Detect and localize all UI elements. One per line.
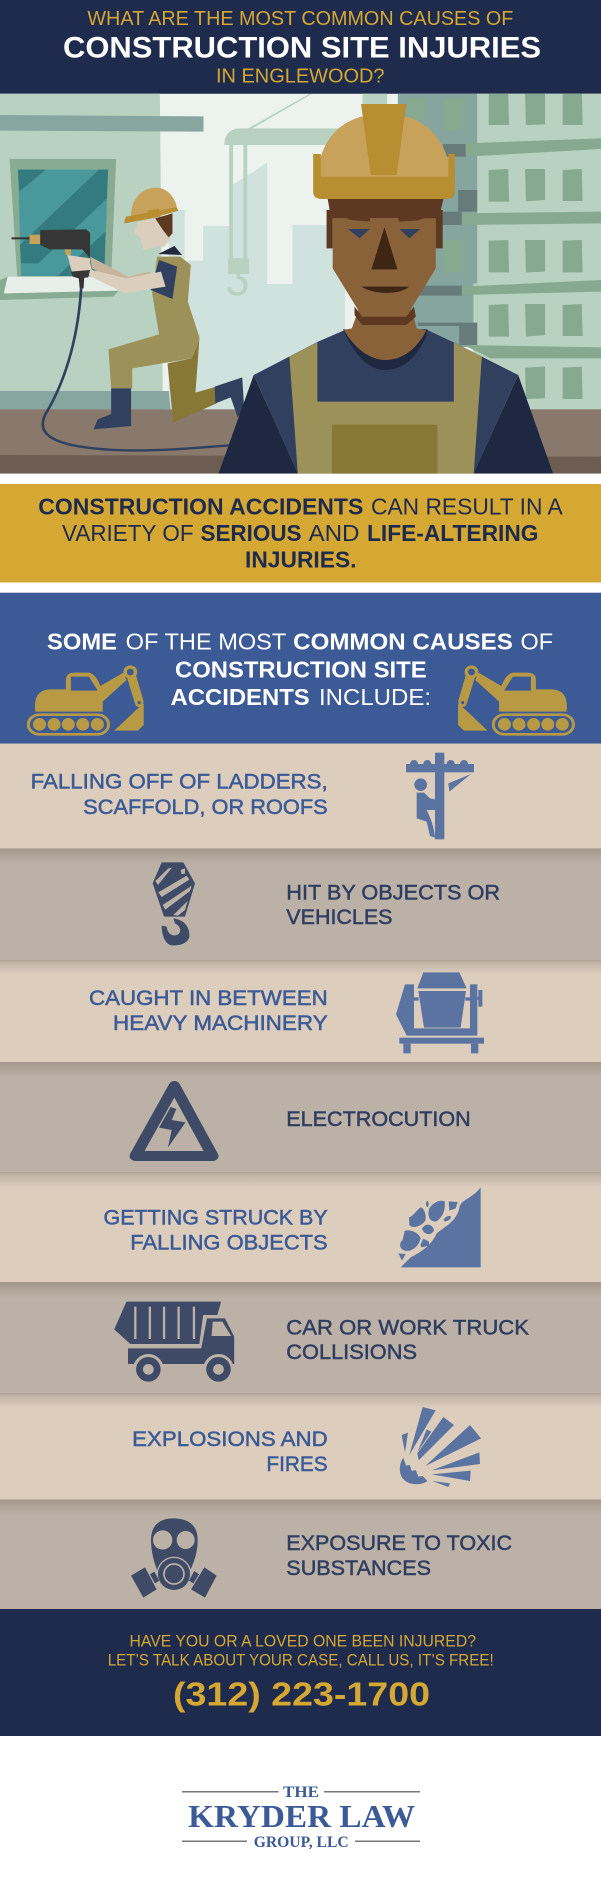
icon: gas mask	[131, 1518, 217, 1598]
illustration: construction workers	[0, 94, 601, 474]
heading: common causes: SOME	[47, 628, 117, 654]
text: toxic substances: SUBSTANCES	[286, 1557, 431, 1580]
large worker in hard hat	[218, 104, 553, 474]
logo: Kryder Law Group	[182, 1784, 420, 1851]
text: collisions	[286, 1316, 529, 1364]
heading: common causes: ACCIDENTS	[170, 684, 310, 710]
icon: pole climber	[406, 753, 474, 839]
panel: electrocution	[0, 1062, 601, 1172]
text: caught in machinery	[89, 987, 328, 1035]
text: hit by objects: HIT BY OBJECTS OR	[286, 881, 500, 904]
panel: call to action	[0, 1609, 601, 1736]
text: construction accidents statement	[38, 493, 563, 573]
logo: Kryder Law Group: KRYDER LAW	[188, 1798, 415, 1834]
heading: common causes: CONSTRUCTION SITE	[175, 656, 427, 682]
text: construction accidents statement: LIFE-ALTERING	[367, 520, 538, 546]
panel: toxic substances	[0, 1500, 601, 1609]
small worker with drill	[11, 188, 244, 450]
text: caught in machinery: HEAVY MACHINERY	[113, 1012, 328, 1035]
heading: main title: CONSTRUCTION SITE INJURIES	[63, 31, 541, 64]
text: falling: FALLING OFF OF LADDERS,	[31, 770, 328, 793]
icon: explosion	[400, 1407, 481, 1487]
text: construction accidents statement: CAN RESULT IN A	[371, 493, 563, 519]
heading: location line: IN ENGLEWOOD?	[216, 66, 384, 88]
text: struck by falling objects: GETTING STRUCK BY	[104, 1206, 328, 1229]
text: call to action	[108, 1633, 494, 1670]
text: construction accidents statement: CONSTRUCTION ACCIDENTS	[38, 493, 363, 519]
text: falling: SCAFFOLD, OR ROOFS	[83, 796, 328, 819]
heading: common causes: INCLUDE:	[319, 684, 431, 710]
logo: Kryder Law Group: GROUP, LLC	[254, 1834, 349, 1851]
icon: dump truck	[114, 1302, 238, 1385]
icon: cement mixer	[396, 972, 484, 1053]
icon: high voltage warning	[135, 1086, 213, 1156]
icon: excavator left	[28, 665, 144, 734]
panel: falling	[0, 744, 601, 848]
text: call to action: LET’S TALK ABOUT YOUR CASE, CALL US, IT’S FREE!	[108, 1652, 494, 1670]
heading: common causes: COMMON CAUSES	[293, 628, 513, 654]
text: call to action: HAVE YOU OR A LOVED ONE BEEN INJURED?	[130, 1633, 476, 1651]
text: collisions: COLLISIONS	[286, 1341, 417, 1364]
logo: Kryder Law Group: THE	[283, 1784, 319, 1801]
heading: intro line: WHAT ARE THE MOST COMMON CAUSES OF	[87, 8, 513, 30]
icon: rockslide	[398, 1187, 481, 1267]
icon: excavator right	[458, 665, 573, 734]
heading: common causes	[47, 628, 553, 710]
panel: gold intro band	[0, 484, 601, 582]
text: construction accidents statement: AND	[308, 520, 360, 546]
heading: common causes: OF	[520, 628, 553, 654]
panel: struck by falling objects	[0, 1172, 601, 1282]
heading: common causes: OF THE MOST	[126, 628, 286, 654]
panel: header	[0, 0, 601, 94]
text: toxic substances	[286, 1532, 512, 1580]
icon: crane hook	[153, 862, 195, 945]
panel: explosions	[0, 1393, 601, 1500]
text: collisions: CAR OR WORK TRUCK	[286, 1316, 529, 1339]
text: construction accidents statement: INJURIES.	[245, 547, 356, 573]
text: hit by objects	[286, 881, 500, 929]
text: struck by falling objects	[104, 1206, 328, 1254]
text: explosions: FIRES	[266, 1453, 328, 1476]
text: toxic substances: EXPOSURE TO TOXIC	[286, 1532, 512, 1555]
text: construction accidents statement: SERIOUS	[200, 520, 302, 546]
text: struck by falling objects: FALLING OBJECTS	[130, 1231, 328, 1254]
panel: collisions	[0, 1282, 601, 1393]
text: explosions	[132, 1428, 328, 1476]
panel: blue heading band	[0, 593, 601, 744]
text: hit by objects: VEHICLES	[286, 906, 392, 929]
panel: caught in machinery	[0, 960, 601, 1062]
text: phone number: (312) 223-1700	[173, 1676, 430, 1713]
panel: hit by objects	[0, 848, 601, 960]
text: explosions: EXPLOSIONS AND	[132, 1428, 328, 1451]
text: construction accidents statement: VARIETY OF	[62, 520, 194, 546]
text: falling	[31, 770, 328, 819]
text: electrocution: ELECTROCUTION	[286, 1108, 471, 1131]
text: caught in machinery: CAUGHT IN BETWEEN	[89, 987, 328, 1010]
